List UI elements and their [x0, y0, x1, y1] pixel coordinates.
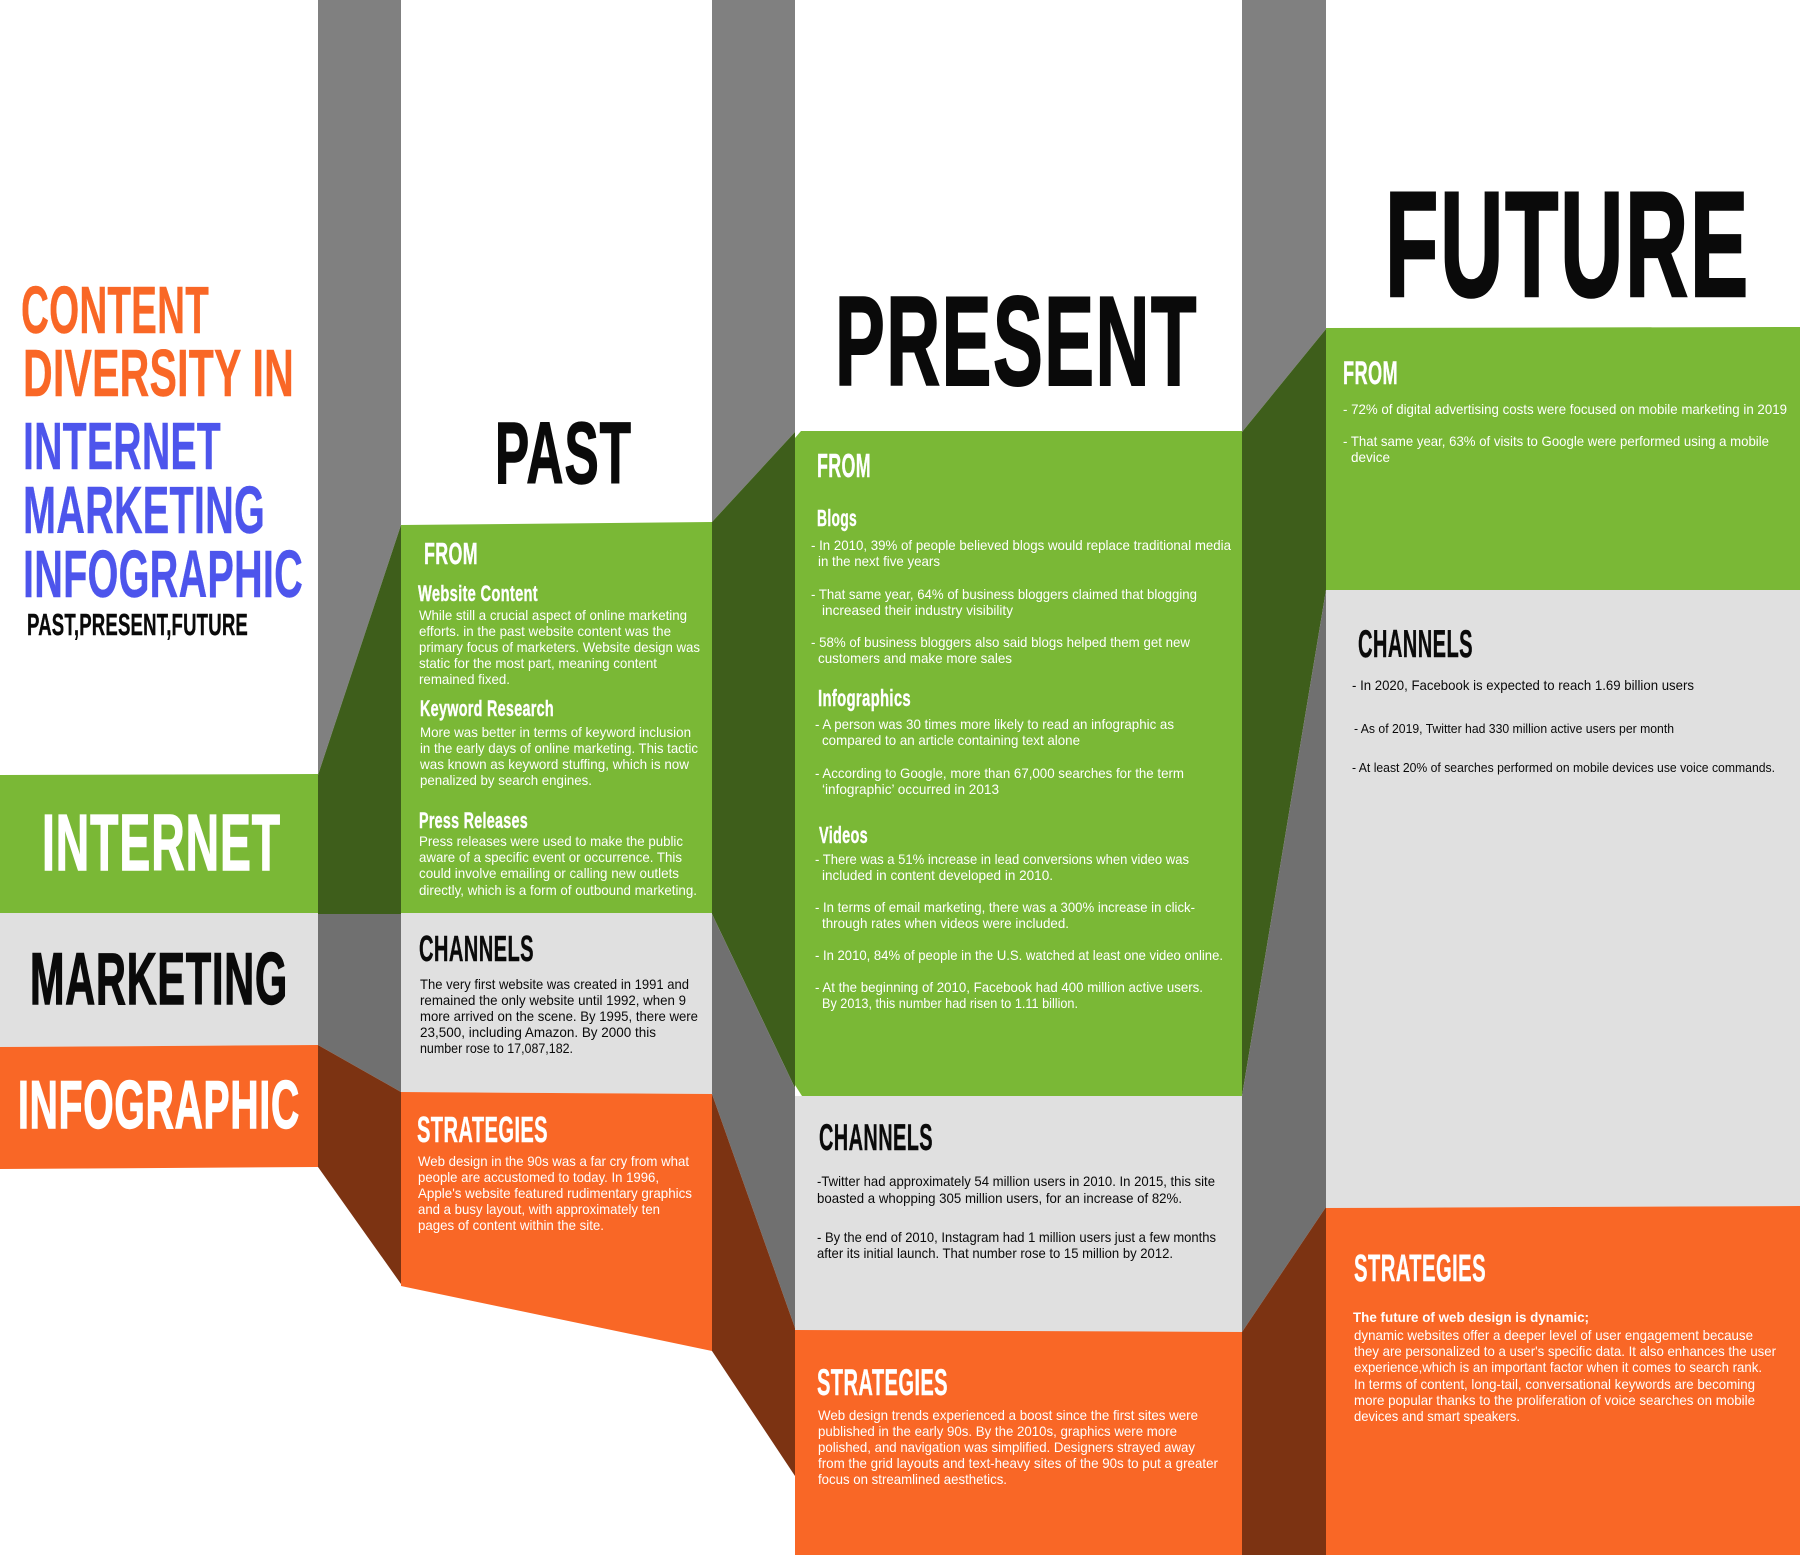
panel: present from: - A person was 30 times more likely to read an infographic as — [815, 717, 1174, 732]
panel: past channels: number rose to 17,087,182. — [420, 1041, 573, 1056]
panel: past from: aware of a specific event or occurrence. This — [419, 850, 682, 865]
panel: past channels: more arrived on the scene. By 1995, there were — [420, 1009, 698, 1024]
panel: present strategies: focus on streamlined aesthetics. — [818, 1472, 1007, 1487]
band: marketing: MARKETING — [30, 939, 288, 1020]
panel: future from: FROM — [1343, 355, 1398, 391]
panel: future strategies: experience,which is an important factor when it comes to search rank. — [1354, 1360, 1762, 1375]
panel: future strategies: they are personalized to a user's specific data. It also enhances the user — [1354, 1344, 1776, 1359]
panel: present from: - According to Google, more than 67,000 searches for the term — [815, 766, 1184, 781]
panel: present from: Videos — [819, 822, 868, 848]
panel: past strategies: STRATEGIES — [417, 1109, 548, 1150]
panel: past strategies — [401, 1092, 712, 1351]
panel: future from — [1326, 327, 1800, 590]
panel: past from: Keyword Research — [420, 696, 554, 721]
panel: present from: Infographics — [818, 685, 911, 711]
title: INFOGRAPHIC — [23, 537, 303, 612]
title: INTERNET — [23, 409, 221, 484]
panel: present from: Blogs — [817, 505, 857, 531]
panel: present from: compared to an article containing text alone — [822, 733, 1080, 748]
panel: present from: - 58% of business bloggers also said blogs helped them get new — [811, 635, 1190, 650]
panel: present from: By 2013, this number had risen to 1.11 billion. — [822, 996, 1078, 1011]
panel: present from: ‘infographic’ occurred in 2013 — [822, 782, 999, 797]
heading: past: PAST — [495, 405, 632, 502]
panel: future strategies: dynamic websites offer a deeper level of user engagement because — [1354, 1328, 1753, 1343]
panel: past channels: remained the only website until 1992, when 9 — [420, 993, 686, 1008]
panel: present from: customers and make more sales — [818, 651, 1012, 666]
panel: past from: could involve emailing or calling new outlets — [419, 866, 679, 881]
panel: present from: included in content developed in 2010. — [822, 868, 1053, 883]
panel: future from: - 72% of digital advertising costs were focused on mobile marketing in 2019 — [1343, 402, 1787, 417]
panel: present from: in the next five years — [818, 554, 940, 569]
panel: present from: - At the beginning of 2010, Facebook had 400 million active users. — [815, 980, 1203, 995]
panel: future channels: CHANNELS — [1358, 623, 1473, 666]
panel: present channels: CHANNELS — [819, 1117, 933, 1158]
panel: past from: was known as keyword stuffing, which is now — [419, 757, 689, 772]
title: MARKETING — [23, 473, 265, 548]
panel: future channels: - As of 2019, Twitter had 330 million active users per month — [1354, 721, 1674, 736]
panel: past strategies: and a busy layout, with approximately ten — [418, 1202, 660, 1217]
band: marketing — [0, 913, 318, 1047]
panel: past from: Press Releases — [419, 808, 528, 833]
panel: future strategies: STRATEGIES — [1354, 1248, 1486, 1290]
band: internet: INTERNET — [42, 798, 281, 887]
panel: past from: efforts. in the past website content was the — [419, 624, 671, 639]
panel: present strategies: polished, and navigation was simplified. Designers strayed away — [818, 1440, 1195, 1455]
title: PAST,PRESENT,FUTURE — [27, 607, 248, 642]
panel: past strategies: people are accustomed to today. In 1996, — [418, 1170, 659, 1185]
panel: past from: directly, which is a form of outbound marketing. — [419, 883, 697, 898]
panel: past from: remained fixed. — [419, 672, 510, 687]
panel: future channels — [1326, 590, 1800, 1208]
panel: present from: - There was a 51% increase in lead conversions when video was — [815, 852, 1189, 867]
panel: present from: - In 2010, 39% of people believed blogs would replace traditional media — [811, 538, 1231, 553]
panel: future strategies — [1326, 1206, 1800, 1555]
panel: past strategies: pages of content within the site. — [418, 1218, 604, 1233]
panel: present channels: - By the end of 2010, Instagram had 1 million users just a few months — [817, 1230, 1216, 1245]
panel: present channels — [795, 1096, 1242, 1332]
panel: present strategies: STRATEGIES — [817, 1362, 948, 1403]
panel: past from: penalized by search engines. — [420, 773, 592, 788]
panel: future from: - That same year, 63% of visits to Google were performed using a mobile — [1343, 434, 1769, 449]
panel: future strategies: more popular thanks to the proliferation of voice searches on mobile — [1354, 1393, 1755, 1408]
panel: past from: Website Content — [418, 581, 538, 606]
panel: future strategies: In terms of content, long-tail, conversational keywords are becoming — [1354, 1377, 1755, 1392]
heading: present: PRESENT — [835, 270, 1198, 412]
band: infographic: INFOGRAPHIC — [18, 1067, 300, 1143]
panel: present from — [795, 431, 1242, 1096]
panel: future strategies: The future of web design is dynamic; — [1353, 1310, 1589, 1325]
connector strip: past to present — [712, 0, 795, 1476]
band: infographic — [0, 1045, 318, 1169]
panel: past channels — [401, 913, 712, 1094]
connector strip: present to future — [1242, 0, 1326, 1555]
panel: past from: primary focus of marketers. Website design was — [419, 640, 700, 655]
panel: past from: While still a crucial aspect of online marketing — [419, 608, 687, 623]
panel: future channels: - In 2020, Facebook is expected to reach 1.69 billion users — [1352, 678, 1694, 693]
panel: present channels: after its initial launch. That number rose to 15 million by 2012. — [817, 1246, 1173, 1261]
panel: past from: Press releases were used to make the public — [419, 834, 683, 849]
title: DIVERSITY IN — [23, 336, 294, 411]
panel: future channels: - At least 20% of searches performed on mobile devices use voice commands. — [1352, 760, 1775, 775]
panel: past channels: 23,500, including Amazon. By 2000 this — [420, 1025, 656, 1040]
panel: present from: - In 2010, 84% of people in the U.S. watched at least one video online. — [815, 948, 1223, 963]
panel: present from: - That same year, 64% of business bloggers claimed that blogging — [811, 587, 1197, 602]
panel: present strategies: Web design trends experienced a boost since the first sites were — [818, 1408, 1198, 1423]
connector strip: title to past — [318, 0, 401, 1284]
title — [21, 273, 303, 642]
panel: past from: in the early days of online marketing. This tactic — [420, 741, 698, 756]
panel: past channels: CHANNELS — [419, 928, 534, 969]
title: CONTENT — [21, 273, 209, 348]
panel: present channels: boasted a whopping 305 million users, for an increase of 82%. — [817, 1191, 1182, 1206]
band: internet — [0, 774, 318, 913]
panel: past from — [401, 522, 712, 913]
panel: past strategies: Apple's website featured rudimentary graphics — [418, 1186, 692, 1201]
panel: future from: device — [1351, 450, 1390, 465]
panel: present from: FROM — [817, 447, 871, 484]
panel: present from: increased their industry visibility — [822, 603, 1013, 618]
panel: past from: FROM — [424, 536, 478, 571]
panel: present strategies: from the grid layouts and text-heavy sites of the 90s to put a greater — [818, 1456, 1218, 1471]
panel: past from: static for the most part, meaning content — [419, 656, 657, 671]
panel: present strategies — [795, 1330, 1242, 1555]
panel: present from: - In terms of email marketing, there was a 300% increase in click- — [815, 900, 1195, 915]
panel: future strategies: devices and smart speakers. — [1354, 1409, 1520, 1424]
panel: present channels: -Twitter had approximately 54 million users in 2010. In 2015, this site — [817, 1174, 1215, 1189]
panel: past channels: The very first website was created in 1991 and — [420, 977, 689, 992]
panel: present from: through rates when videos were included. — [822, 916, 1069, 931]
panel: past from: More was better in terms of keyword inclusion — [420, 725, 691, 740]
panel: present strategies: published in the early 90s. By the 2010s, graphics were more — [818, 1424, 1177, 1439]
panel: past strategies: Web design in the 90s was a far cry from what — [418, 1154, 689, 1169]
